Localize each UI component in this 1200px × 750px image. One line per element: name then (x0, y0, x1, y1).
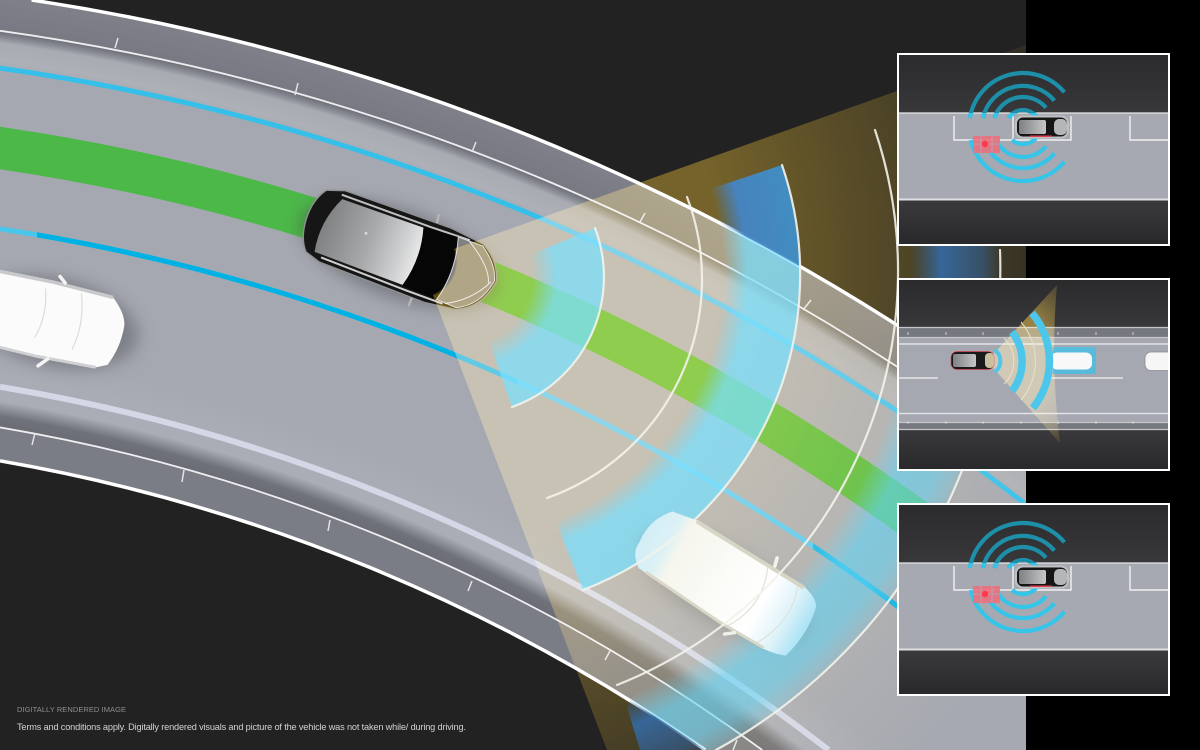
sensor bands on the road (490, 224, 960, 750)
icon: sonar arcs (970, 73, 1064, 181)
icon: pedestrian alert marker (973, 136, 1000, 153)
small silver car (1015, 116, 1069, 138)
small silver car (951, 352, 994, 370)
white car, rear left (0, 254, 148, 383)
icon: pedestrian alert marker (973, 586, 1000, 603)
caption: terms and conditions: Terms and conditions apply. Digitally rendered visuals and picture of the vehicle was not taken while/ during driving. (17, 722, 466, 732)
small silver car (1015, 566, 1069, 588)
inset panel: forward radar following a car (898, 279, 1175, 470)
upper blue lane line (0, 68, 1030, 508)
lead white car marker (1051, 347, 1096, 374)
green lane path (0, 144, 1030, 609)
white sensor wave arcs (512, 130, 1000, 750)
lower blue lane line (0, 226, 897, 610)
sensor bands off the road (627, 165, 998, 750)
second white car (1144, 352, 1168, 371)
white car, ahead in the sensor zone (620, 496, 830, 668)
black side margin (1026, 0, 1200, 750)
icon: sonar arcs (970, 523, 1064, 631)
main silver car (286, 171, 514, 332)
small sensor cone (987, 285, 1060, 443)
radar arcs (995, 313, 1049, 408)
sensor cone (420, 45, 1026, 750)
inset panel: parking, rear sensors top (898, 54, 1170, 245)
inset panel: parking, rear sensors bottom (898, 504, 1170, 695)
caption: image note: DIGITALLY RENDERED IMAGE (17, 705, 126, 714)
